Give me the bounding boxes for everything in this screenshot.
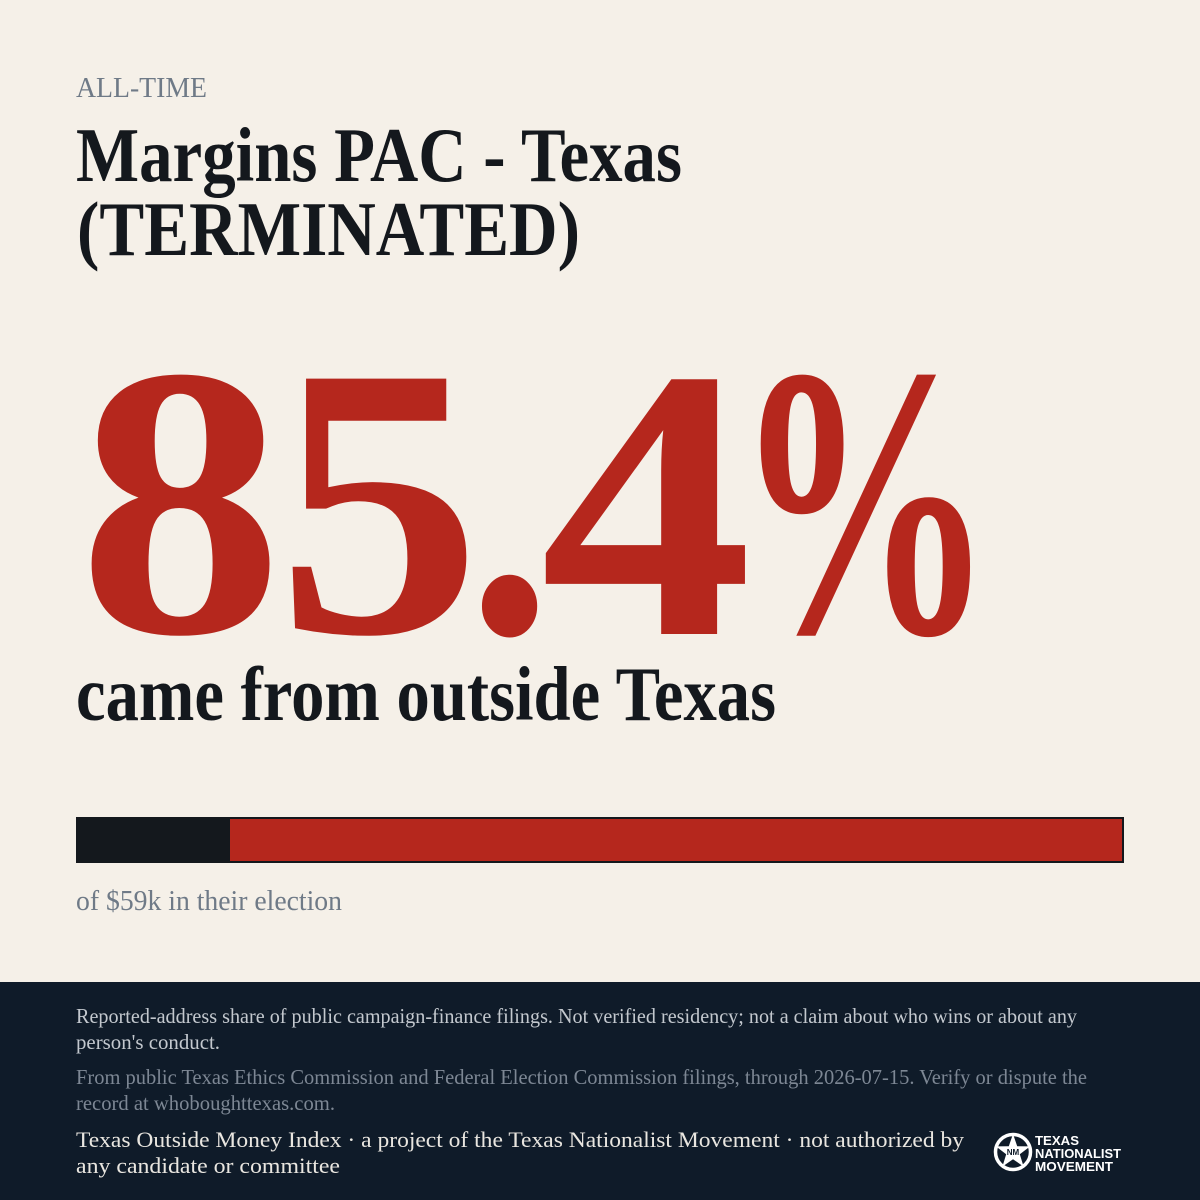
title: Margins PAC - Texas — [76, 112, 682, 198]
big statistic: 85.4%: . — [467, 287, 552, 716]
attribution text: Texas Outside Money Index · a project of the Texas Nationalist Movement · not authorized by — [76, 1127, 964, 1152]
big statistic: 85.4% — [78, 287, 994, 718]
big statistic: 85.4%: % — [734, 288, 994, 716]
logo: Texas Nationalist Movement — [996, 1133, 1121, 1174]
disclaimer text — [76, 1004, 1077, 1054]
source text: record at whoboughttexas.com. — [76, 1091, 335, 1115]
disclaimer text: person's conduct. — [76, 1030, 220, 1054]
source text: From public Texas Ethics Commission and Federal Election Commission filings, through 2026-07-15. Verify or dispute the — [76, 1065, 1087, 1089]
big statistic: 85.4%: 4 — [540, 289, 753, 718]
logo: Texas Nationalist Movement: NATIONALIST — [1035, 1146, 1121, 1161]
footer panel — [0, 982, 1200, 1200]
eyebrow: all-time: ALL-TIME — [76, 73, 207, 104]
attribution text: any candidate or committee — [76, 1153, 340, 1178]
disclaimer text: Reported-address share of public campaign-finance filings. Not verified residency; not a claim about who wins or about any — [76, 1004, 1077, 1028]
source text — [76, 1065, 1087, 1115]
big statistic: 85.4%: 85 — [78, 288, 481, 716]
title: (TERMINATED) — [77, 186, 580, 272]
logo: Texas Nationalist Movement: NM — [1007, 1148, 1020, 1157]
logo: Texas Nationalist Movement: MOVEMENT — [1035, 1159, 1113, 1174]
subheading: came from outside Texas — [76, 651, 776, 737]
attribution text — [76, 1127, 964, 1178]
logo: Texas Nationalist Movement: TEXAS — [1035, 1133, 1079, 1148]
title — [76, 112, 682, 272]
bar caption: of $59k in their election — [76, 885, 342, 917]
progress bar: in-state vs outside share — [76, 817, 1124, 863]
